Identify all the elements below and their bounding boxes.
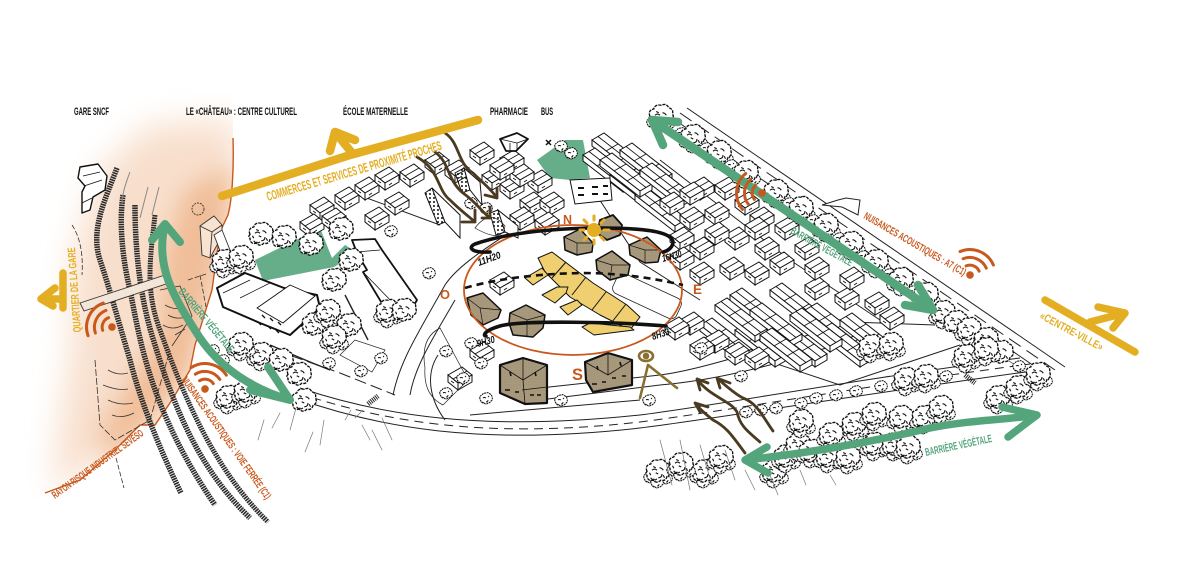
crosswalks xyxy=(368,375,975,404)
noise icon: near gare xyxy=(81,300,123,345)
label: gare SNCF: GARE SNCF xyxy=(74,106,109,118)
noise icon: motorway north xyxy=(735,173,767,211)
compass letter O: O xyxy=(440,287,450,302)
yellow arrow: centre-ville xyxy=(1045,300,1135,352)
time label 8H33: 8H33 xyxy=(651,327,671,343)
label: barrière végétale north-east: BARRIÈRE VÉGÉTALE xyxy=(789,224,855,269)
neighbourhood houses xyxy=(300,133,904,390)
label: barrière végétale west: BARRIÈRE VÉGÉTALE xyxy=(176,286,237,355)
icon: bus stop marker xyxy=(546,140,551,145)
building: west house 1 xyxy=(467,293,501,325)
label: pharmacie: PHARMACIE xyxy=(490,106,528,118)
building: south-west block xyxy=(500,358,547,404)
green spaces xyxy=(255,140,590,281)
grass hatching xyxy=(258,408,836,495)
building: west house 2 xyxy=(509,305,545,337)
building: north house behind sun xyxy=(597,215,622,240)
yellow arrow: quartier de la gare xyxy=(41,273,63,308)
railway tracks xyxy=(97,168,268,522)
time label 11H20: 11H20 xyxy=(476,250,503,269)
icon: pharmacie building xyxy=(500,133,528,151)
green barrier arrow: motorway side xyxy=(652,120,933,310)
wavy arrows: approach from south xyxy=(695,378,773,453)
black summer sun arc xyxy=(471,228,673,252)
label: commerces et services: COMMERCES ET SERVICES DE PROXIMITÉ PROCHES xyxy=(265,138,444,204)
left building: two white volumes xyxy=(217,273,320,335)
green barrier arrow: railway side xyxy=(152,224,290,400)
long school building xyxy=(352,239,417,307)
bridge over the tracks xyxy=(80,274,172,311)
yellow project building xyxy=(525,252,640,335)
building: north-east house xyxy=(629,237,661,263)
noise icon: motorway east xyxy=(952,245,996,285)
icon: sun xyxy=(580,216,609,244)
building: centre house xyxy=(596,251,630,280)
site analysis axonometric map xyxy=(37,104,1139,524)
A7 motorway xyxy=(660,108,1065,375)
label: centre-ville: «CENTRE-VILLE» xyxy=(1038,310,1105,354)
label: nuisances A7: NUISANCES ACOUSTIQUES : A7 (C1) xyxy=(862,210,968,279)
brown buildings around the site xyxy=(467,215,661,404)
building: south-east block xyxy=(585,353,632,392)
white public building top centre xyxy=(570,178,612,204)
label: nuisances voie ferrée: NUISANCES ACOUSTIQUES : VOIE FERRÉE (C1) xyxy=(179,374,274,502)
interchange structure xyxy=(822,198,860,215)
label: école maternelle: ÉCOLE MATERNELLE xyxy=(343,105,408,118)
time label 9H30: 9H30 xyxy=(476,335,496,350)
trees: motorway hedge xyxy=(647,104,1025,372)
compass letter N: N xyxy=(563,212,572,227)
label: rayon risque seveso: RAYON RISQUE INDUSTRIEL SEVESO xyxy=(50,428,146,501)
label: bus: BUS xyxy=(541,106,553,118)
compass letter S: S xyxy=(572,365,583,384)
time label 16H30: 16H30 xyxy=(661,249,683,265)
icon: gare SNCF building xyxy=(78,164,107,213)
label: château: LE «CHÂTEAU» : CENTRE CULTUREL xyxy=(186,105,297,118)
château building xyxy=(192,203,230,258)
label: quartier de la gare: QUARTIER DE LA GARE xyxy=(66,247,84,333)
label: barrière végétale south: BARRIÈRE VÉGÉTALE xyxy=(924,432,993,459)
railway yard details xyxy=(72,225,206,488)
green barrier arrow: south road xyxy=(745,407,1037,473)
black winter sun arc xyxy=(484,322,666,336)
Seveso boundary line xyxy=(45,138,233,493)
sun path diagram xyxy=(440,212,702,384)
dotted tall buildings xyxy=(425,168,518,238)
wavy arrows: approach from north xyxy=(417,133,497,222)
dashed equinox arc xyxy=(465,273,683,288)
noise icon: railway xyxy=(187,360,228,396)
orange orientation ellipse xyxy=(464,225,682,355)
building: north house 1 xyxy=(564,229,593,255)
compass letter E: E xyxy=(693,281,702,297)
trees: west and centre xyxy=(207,141,747,414)
plot outlines xyxy=(270,217,683,405)
roads network xyxy=(275,160,1040,435)
icon: eye viewpoint figure xyxy=(639,351,677,398)
trees: lower road barrier xyxy=(644,332,1052,488)
yellow arrow: commerces xyxy=(222,120,478,196)
orange Seveso risk zone xyxy=(55,120,240,495)
